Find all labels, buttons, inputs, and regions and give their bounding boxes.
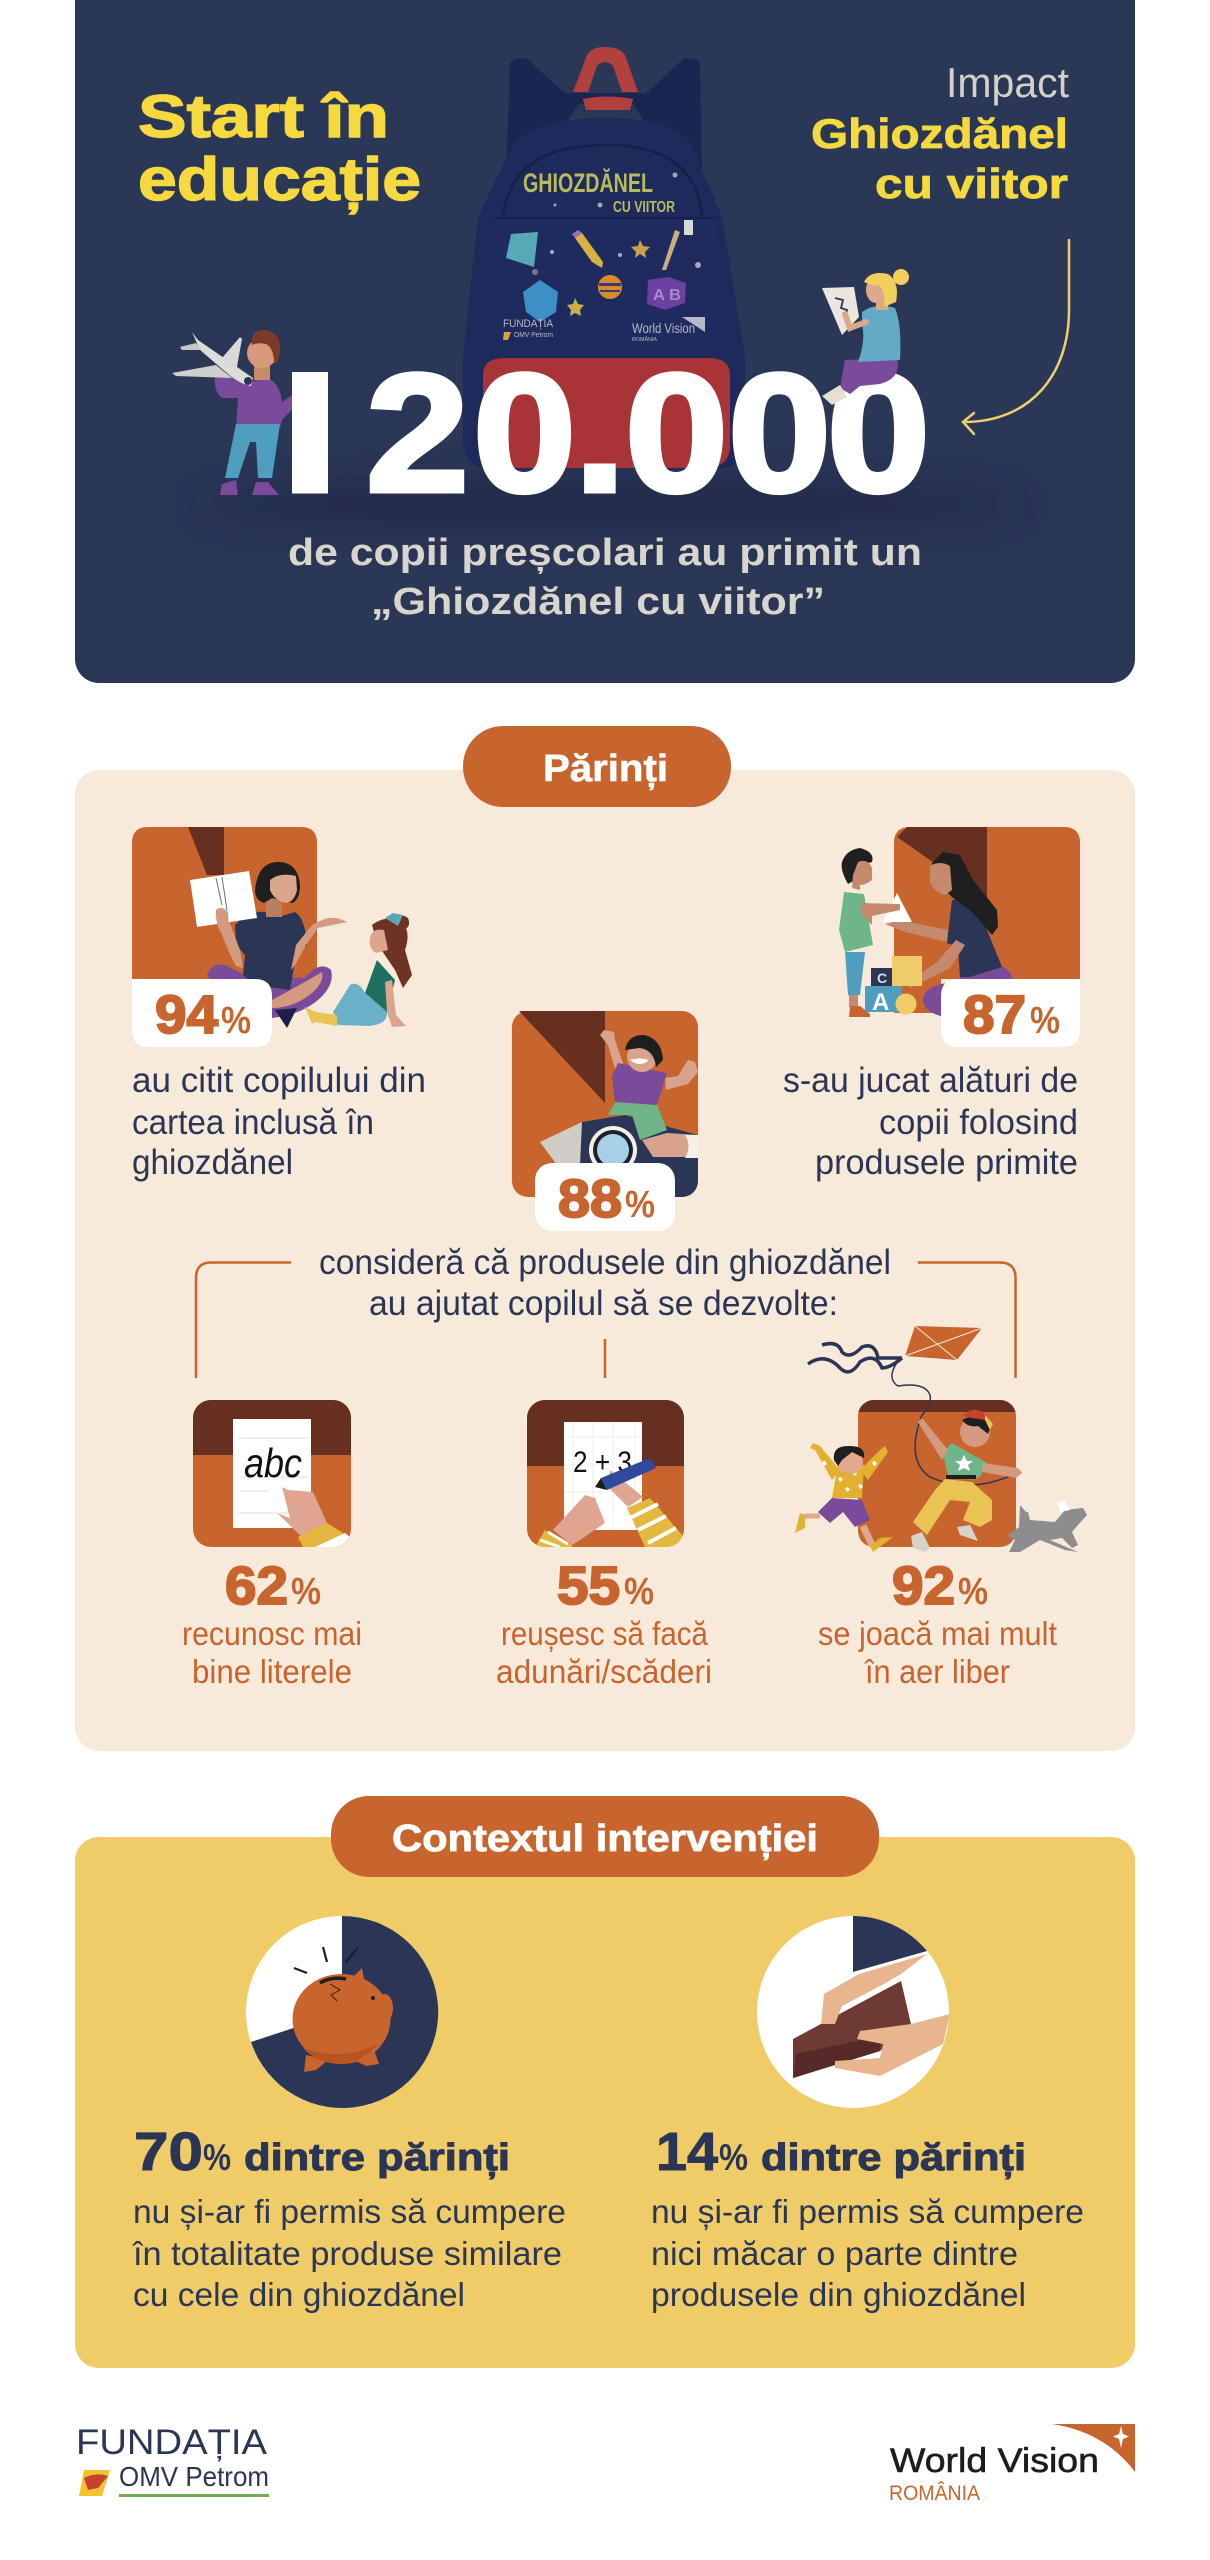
description [783,1061,1078,1182]
text: consideră că: consideră că produsele din ghiozdănel [319,1243,891,1282]
value [225,1556,321,1616]
mother and girl illustration [190,862,412,1028]
card: kite and children [795,1326,1087,1690]
logo: World Vision România: ROMÂNIA [889,2482,980,2505]
backpack label: GHIOZDĂNEL [523,167,653,198]
value label: 88 [558,1169,622,1229]
value: 62 [225,1556,288,1616]
text: consideră că: au ajutat copilul să se dezvolte: [369,1284,838,1323]
subtitle [288,532,922,623]
stat text: 14%: nu și-ar fi permis să cumpere [651,2193,1084,2230]
card: 2 + 3: 2 + 3 [573,1446,632,1479]
stat text: 14%: % [719,2137,748,2178]
description: produsele primite [815,1143,1078,1182]
heading pill [331,1796,879,1877]
subtitle: de copii preșcolari au primit un [288,532,922,574]
card: 2 + 3 [496,1400,712,1690]
stat text: 70%: % [203,2137,231,2178]
illustration: backpack: CU VIITOR [613,199,675,216]
child on rocket [540,1030,698,1197]
stat card 87% [783,827,1080,1182]
logo: Fundația OMV Petrom: FUNDAȚIA [76,2423,268,2462]
chart: 14% pie with wallet [757,1916,950,2108]
stat card 88% [512,1011,698,1231]
label [818,1615,1057,1690]
value: 55 [557,1556,620,1616]
stat text: 70%: 70 [134,2122,203,2182]
logo: World Vision România [889,2424,1135,2505]
panel: Contextul intervenției [75,1796,1135,2368]
label: se joacă mai mult [818,1615,1057,1652]
value [557,1556,654,1616]
stat text: 70%: dintre părinți [244,2137,510,2179]
shadow under number [190,483,1030,527]
parent and child with blocks [839,848,1013,1017]
heading: Impact Ghiozdănel cu viitor: Ghiozdănel [811,110,1068,157]
heading pill: Părinți: Părinți [543,748,668,790]
stat text: 70% [132,2122,566,2313]
heading pill: Părinți [463,726,731,807]
stat text: 14%: nici măcar o parte dintre [651,2235,1018,2272]
heading: Impact Ghiozdănel cu viitor [811,59,1069,207]
value: 92 [892,1556,955,1616]
panel: hero navy [75,0,1135,683]
backpack decor: A B [653,287,681,304]
heading: Impact Ghiozdănel cu viitor: cu viitor [875,160,1068,207]
arrow to number [963,240,1069,434]
label [182,1615,362,1690]
title: Start în educație [138,83,421,214]
icon: dog [1007,1505,1087,1552]
backpack decor: ROMÂNIA [632,336,658,343]
big number [292,371,925,496]
stat text: 70%: cu cele din ghiozdănel [133,2276,465,2313]
chart: 70% pie with piggy bank [246,1916,438,2108]
value: % [958,1571,988,1613]
value label [535,1163,675,1231]
description: s-au jucat alături de [783,1061,1078,1100]
value: % [291,1571,321,1613]
value: % [624,1571,654,1613]
title: Start în educație: educație [138,146,421,214]
icon: kite [808,1326,1017,1485]
logo: Fundația OMV Petrom: OMV Petrom [119,2461,269,2492]
stat text: 14%: 14 [656,2122,718,2182]
value label: % [1030,1000,1060,1042]
backpack decor [503,172,705,343]
card: abc: abc [244,1440,302,1486]
stat text: 14% [651,2122,1084,2313]
value label [941,979,1080,1047]
bracket connector [196,1262,1016,1378]
label: reușesc să facă [501,1615,709,1652]
logo: Fundația OMV Petrom [76,2423,269,2497]
value label: 94 [155,985,218,1045]
backpack decor: FUNDAȚIA [503,318,554,330]
label: adunări/scăderi [496,1653,712,1690]
card: abc [182,1400,362,1690]
backpack decor: World Vision [632,320,695,336]
description [132,1061,426,1182]
label [496,1615,712,1690]
children and dog [795,1410,1087,1552]
big number: 120.000 [254,340,930,527]
illustration: girl reading [822,269,909,405]
illustration: boy with plane [172,330,307,495]
value label: 87 [963,985,1026,1045]
stat text: 70%: nu și-ar fi permis să cumpere [133,2193,566,2230]
panel: Părinți [75,726,1135,1751]
description: ghiozdănel [132,1143,293,1182]
value label [132,979,272,1047]
stat text: 14%: produsele din ghiozdănel [651,2276,1026,2313]
subtitle: „Ghiozdănel cu viitor” [371,581,825,623]
description: cartea inclusă în [132,1103,374,1142]
description: copii folosind [879,1103,1078,1142]
icon: OMV Petrom [79,2470,110,2496]
label: în aer liber [864,1653,1010,1690]
logo: World Vision România: World Vision [890,2442,1099,2480]
stat card 94% [132,827,426,1182]
value label: % [625,1184,655,1226]
heading pill: Contextul intervenției [392,1818,818,1860]
value label: % [221,1000,251,1042]
text: consideră că [319,1243,891,1323]
label: recunosc mai [182,1615,362,1652]
backpack decor: OMV Petrom [514,332,553,339]
value [892,1556,988,1616]
illustration: backpack [463,47,745,469]
heading: Impact Ghiozdănel cu viitor: Impact [946,59,1069,106]
stat text: 70%: în totalitate produse similare [132,2235,562,2272]
parent and child with blocks: C [877,970,887,986]
parent and child with blocks: A [872,989,889,1016]
description: au citit copilului din [132,1061,426,1100]
title: Start în educație: Start în [138,83,389,150]
stat text: 14%: dintre părinți [761,2137,1026,2179]
label: bine literele [192,1653,352,1690]
